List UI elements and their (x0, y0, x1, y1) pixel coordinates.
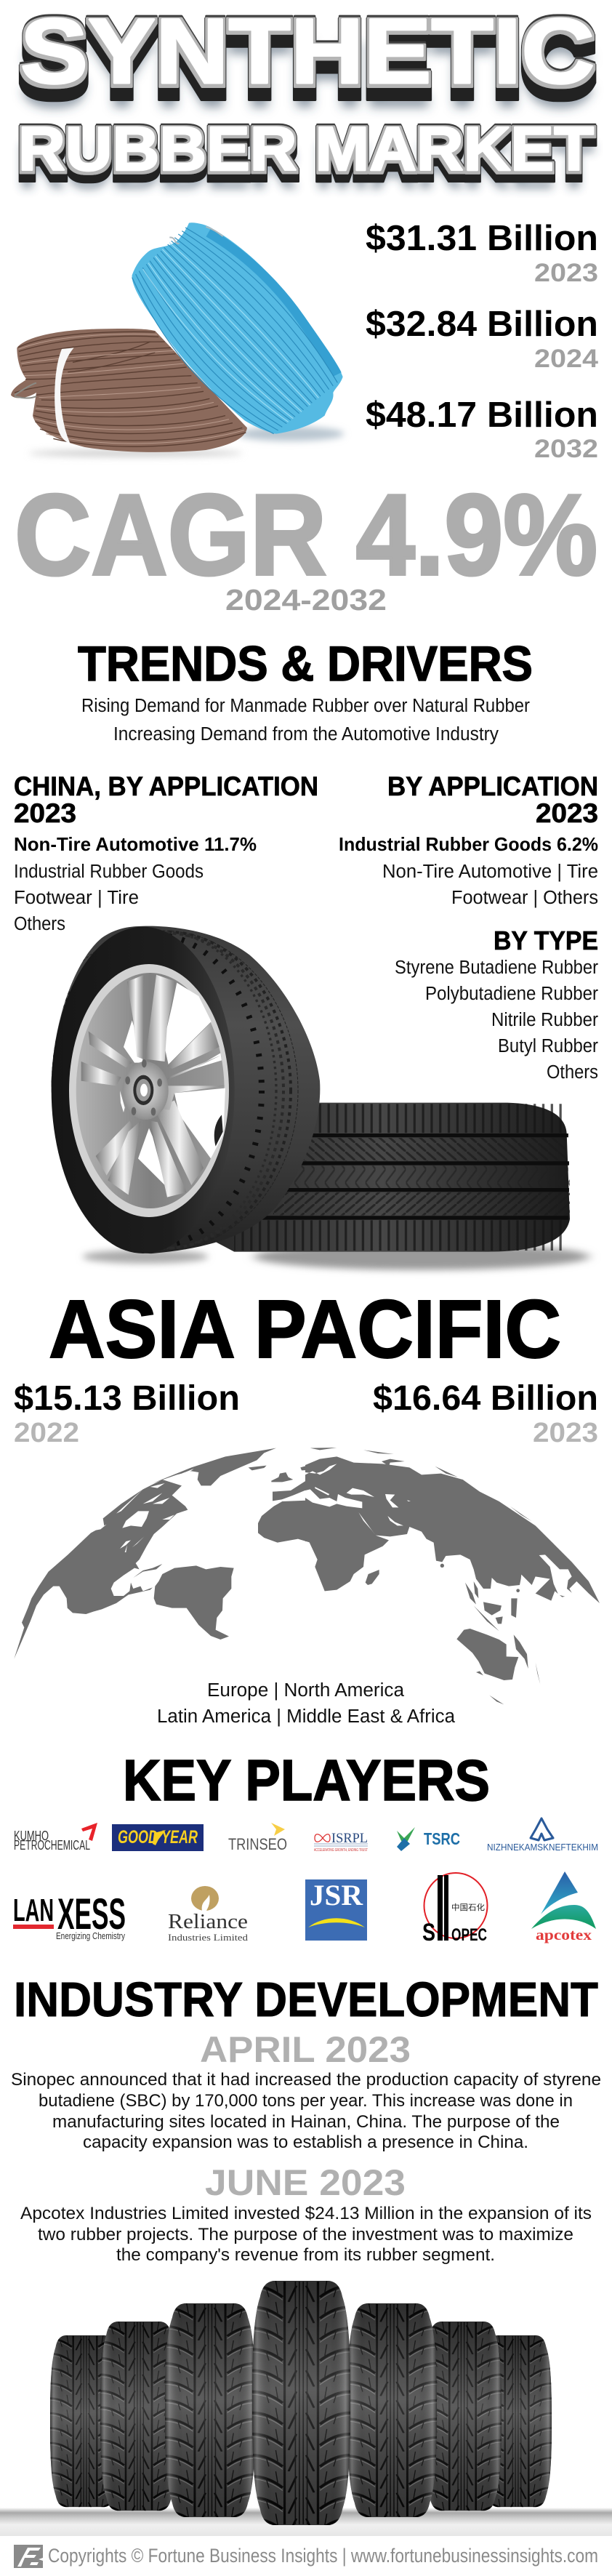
logo: TSRC: TSRC (424, 1829, 460, 1848)
logo: Trinseo: TRINSEO (228, 1835, 287, 1853)
stat: Asia Pacific 2022 (14, 1379, 240, 1448)
development: April 2023 (11, 2029, 601, 2152)
development: June 2023: Apcotex Industries Limited invested $24.13 Million in the expansion of its (20, 2204, 592, 2223)
panel: global by application (339, 771, 598, 908)
panel: global by application: BY APPLICATION (387, 771, 598, 801)
stat: 2023 market size: 2023 (534, 259, 598, 287)
heading: trends and drivers: TRENDS & DRIVERS (78, 636, 533, 691)
text block: trends list: Increasing Demand from the Automotive Industry (113, 724, 499, 745)
world map globe (14, 1448, 600, 1704)
icon: row of tyres (0, 2281, 612, 2536)
title (18, 0, 595, 184)
stat: Asia Pacific 2022: $15.13 Billion (14, 1379, 240, 1418)
icon: rubber wire coils (11, 222, 344, 457)
stat: Asia Pacific 2023: $16.64 Billion (373, 1379, 598, 1418)
stat: 2024 market size (366, 305, 599, 373)
stat: Asia Pacific 2023 (373, 1379, 598, 1448)
panel: China by application (14, 771, 318, 934)
panel: by type: BY TYPE (494, 926, 598, 955)
logo: ISRPL: ACCELERATING GROWTH, ENDING TRUST (314, 1848, 368, 1853)
CAGR heading: 2024-2032 (225, 583, 387, 617)
title: SYNTHETIC (20, 0, 595, 103)
stat: 2024 market size: $32.84 Billion (366, 305, 598, 344)
icon: rear tyre lying flat (195, 1103, 589, 1270)
development: April 2023: Sinopec announced that it had increased the production capacity of styrene (11, 2070, 601, 2090)
logo: Goodyear (112, 1824, 204, 1851)
stat: 2024 market size: 2024 (534, 345, 599, 373)
panel: by type: Styrene Butadiene Rubber (395, 958, 598, 978)
title: RUBBER MARKET (18, 115, 594, 184)
logo: JSR (305, 1879, 367, 1941)
logo: Kumho Petrochemical (14, 1823, 97, 1853)
panel: China by application: 2023 (14, 798, 76, 828)
logo: Sinopec: OPEC (451, 1925, 487, 1945)
stat: 2032 market size: 2032 (534, 435, 598, 463)
logo: Sinopec: 中国石化 (451, 1902, 485, 1912)
logo: Reliance: Reliance (168, 1911, 248, 1933)
logo: Nizhnekamskneftekhim: NIZHNEKAMSKNEFTEKHIM (487, 1842, 598, 1853)
logo: Lanxess: XESS (57, 1890, 126, 1938)
development: April 2023: capacity expansion was to establish a presence in China. (83, 2132, 528, 2152)
panel: by type: Butyl Rubber (498, 1036, 598, 1056)
development: June 2023: the company's revenue from its rubber segment. (116, 2245, 495, 2265)
heading: key players: KEY PLAYERS (123, 1748, 490, 1813)
panel: global by application: Footwear | Others (451, 888, 598, 908)
stat: 2023 market size: $31.31 Billion (366, 219, 598, 258)
development: June 2023: JUNE 2023 (205, 2162, 406, 2203)
stat: Asia Pacific 2022: 2022 (14, 1418, 79, 1448)
logo: Apcotex: apcotex (536, 1926, 592, 1943)
logo: Nizhnekamskneftekhim (487, 1818, 598, 1853)
text block: trends list: Rising Demand for Manmade Rubber over Natural Rubber (81, 696, 530, 716)
logo: Reliance: Industries Limited (168, 1932, 249, 1943)
panel: China by application: Industrial Rubber Goods (14, 862, 204, 882)
panel: China by application: CHINA, BY APPLICATION (14, 771, 318, 801)
panel: China by application: Footwear | Tire (14, 888, 139, 908)
development: April 2023: manufacturing sites located in Hainan, China. The purpose of the (52, 2112, 560, 2132)
panel: global by application: Non-Tire Automotive | Tire (382, 862, 598, 882)
logo: ISRPL (314, 1831, 368, 1853)
panel: by type (395, 926, 598, 1083)
development: April 2023: butadiene (SBC) by 170,000 tons per year. This increase was done in (39, 2091, 573, 2111)
logo: Lanxess: Energizing Chemistry (56, 1930, 125, 1941)
panel: by type: Others (547, 1062, 598, 1083)
logo: JSR: JSR (310, 1879, 363, 1911)
logo: Goodyear: GOOD YEAR (118, 1827, 198, 1847)
panel: China by application: Others (14, 914, 65, 934)
text block: other regions: Europe | North America (207, 1680, 405, 1701)
heading: Asia Pacific: ASIA PACIFIC (49, 1283, 561, 1375)
logo: Lanxess (13, 1890, 126, 1941)
logo: Lanxess: LAN (13, 1893, 54, 1928)
logo: Reliance (168, 1886, 249, 1943)
stat: 2023 market size (366, 219, 598, 287)
panel: China by application: Non-Tire Automotive 11.7% (14, 833, 257, 855)
development: June 2023: two rubber projects. The purpose of the investment was to maximize (38, 2225, 573, 2244)
logo: Kumho Petrochemical: PETROCHEMICAL (14, 1838, 90, 1853)
text block: other regions (157, 1680, 456, 1727)
logo: Apcotex (531, 1871, 596, 1943)
development: June 2023 (20, 2162, 592, 2265)
logo: Sinopec: S (422, 1919, 435, 1946)
development: April 2023: APRIL 2023 (200, 2029, 411, 2070)
logo: TSRC (397, 1827, 460, 1851)
text block: trends list (81, 696, 530, 745)
logo: Trinseo (228, 1823, 287, 1853)
logo: ISRPL: ISRPL (331, 1831, 368, 1846)
stat: 2032 market size (366, 396, 598, 463)
panel: by type: Polybutadiene Rubber (425, 984, 598, 1004)
icon: upright tyre with alloy wheel (27, 926, 320, 1264)
panel: global by application: Industrial Rubber Goods 6.2% (339, 833, 598, 855)
logo: Kumho Petrochemical: KUMHO (14, 1829, 49, 1843)
text block: other regions: Latin America | Middle East & Africa (157, 1706, 456, 1727)
panel: by type: Nitrile Rubber (491, 1010, 598, 1030)
stat: Asia Pacific 2023: 2023 (533, 1418, 598, 1448)
logo: Sinopec (422, 1873, 487, 1946)
panel: global by application: 2023 (536, 798, 598, 828)
stat: 2032 market size: $48.17 Billion (366, 396, 598, 435)
